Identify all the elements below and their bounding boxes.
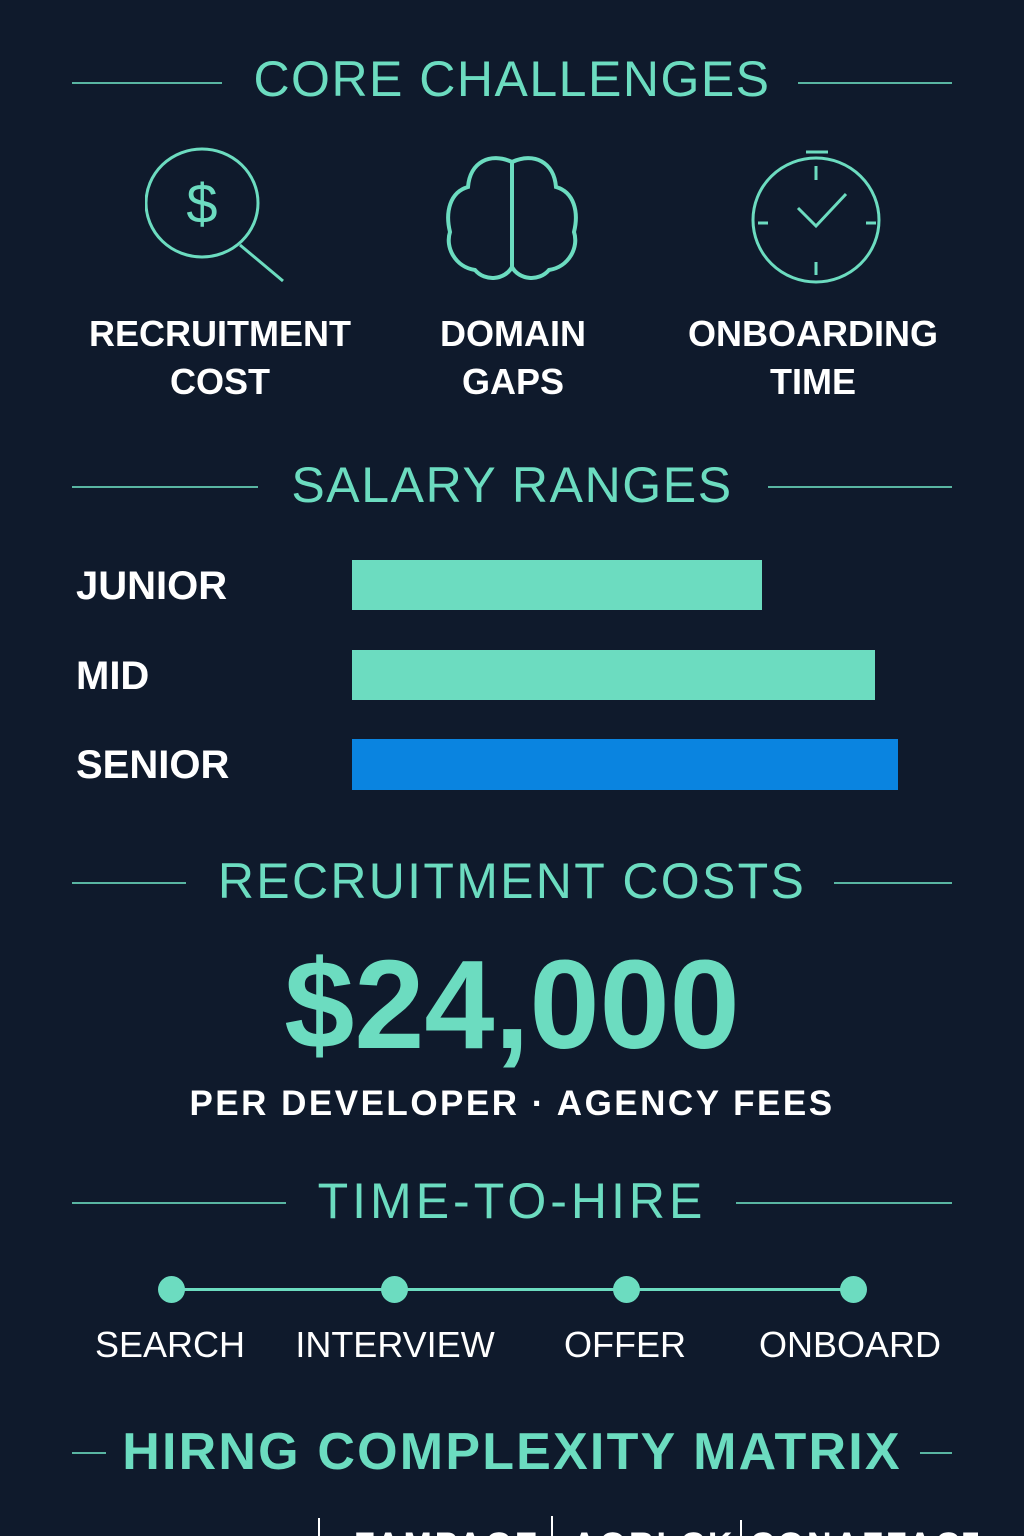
step: onboard: ONBOARD (759, 1324, 941, 1365)
label: recruitment cost: RECRUITMENT (89, 313, 351, 354)
big number: $24,000 (284, 934, 740, 1075)
title: hiring complexity matrix: HIRNG COMPLEXITY MATRIX (122, 1423, 902, 1481)
step: search (95, 1276, 245, 1365)
row: mid (76, 650, 875, 700)
label: domain gaps: DOMAIN (440, 313, 586, 354)
label: onboarding time: ONBOARDING (688, 313, 938, 354)
title: salary ranges: SALARY RANGES (291, 457, 733, 513)
icon: stopwatch (752, 150, 880, 284)
label: recruitment cost (89, 313, 351, 402)
label: onboarding time (688, 313, 938, 402)
label: domain gaps (440, 313, 586, 402)
row: senior (76, 739, 898, 790)
icon: dollar magnifier (145, 148, 284, 282)
row: senior: SENIOR (76, 743, 229, 787)
bar chart: salary (76, 560, 898, 790)
matrix header (cut off) (318, 1516, 978, 1536)
icon: brain (446, 156, 578, 280)
label: recruitment cost: COST (170, 361, 270, 402)
icon: dollar magnifier: $ (186, 172, 218, 235)
title: recruitment costs: RECRUITMENT COSTS (218, 853, 806, 909)
step: offer (564, 1276, 686, 1365)
title: time-to-hire: TIME-TO-HIRE (318, 1173, 706, 1229)
step: search: SEARCH (95, 1324, 245, 1365)
step: onboard (759, 1276, 941, 1365)
timeline (95, 1276, 941, 1365)
title: core challenges: CORE CHALLENGES (253, 51, 771, 107)
row: junior (76, 560, 762, 610)
row: junior: JUNIOR (76, 564, 227, 608)
row: mid: MID (76, 654, 149, 698)
step: interview (295, 1276, 495, 1365)
step: offer: OFFER (564, 1324, 686, 1365)
label: domain gaps: GAPS (462, 361, 564, 402)
label: onboarding time: TIME (770, 361, 856, 402)
subtitle: PER DEVELOPER · AGENCY FEES (189, 1084, 835, 1123)
step: interview: INTERVIEW (295, 1324, 495, 1365)
